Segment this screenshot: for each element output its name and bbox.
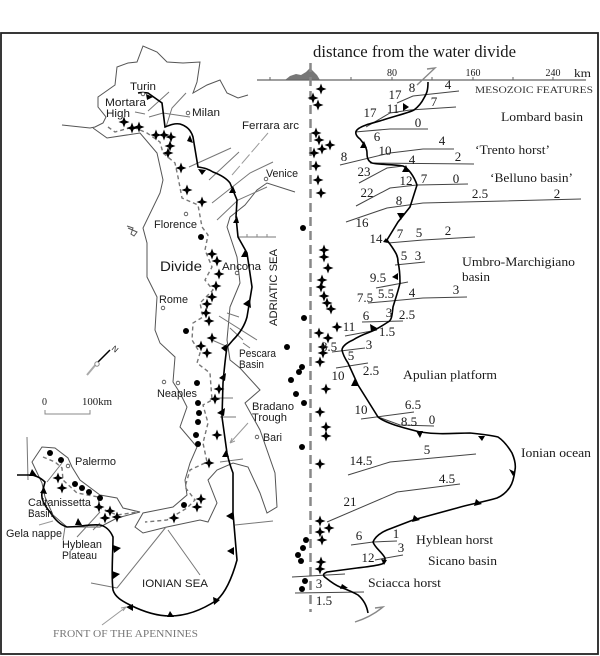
right panel: section numbers: 4	[409, 152, 416, 167]
right panel: section numbers: 1.5	[316, 593, 332, 608]
right panel: section numbers: 12	[362, 550, 374, 565]
map labels: Bradano	[252, 401, 294, 413]
right panel: section numbers: 2.5	[472, 186, 488, 201]
scale bar	[42, 397, 112, 414]
front of the Apennines label: FRONT OF THE APENNINES	[53, 629, 198, 640]
scale bar: 0	[42, 397, 47, 408]
right panel: section numbers: 3	[366, 337, 372, 352]
right panel: section numbers: 4	[439, 133, 446, 148]
right panel: section numbers: 5	[416, 225, 422, 240]
map labels: Rome	[159, 294, 188, 306]
right panel: section numbers: 14.5	[350, 453, 372, 468]
right panel: region labels: Lombard basin	[501, 109, 584, 124]
right panel: front triangles	[340, 103, 515, 589]
water divide on map	[43, 127, 213, 522]
right panel: section numbers: 2.5	[363, 363, 379, 378]
right panel: region labels: Sciacca horst	[368, 575, 441, 590]
map labels	[6, 81, 300, 590]
right panel: section numbers: 2	[445, 223, 451, 238]
map labels: Milan	[192, 107, 220, 119]
right panel: section numbers: 9.5	[370, 270, 386, 285]
right panel: section numbers: 3	[316, 576, 322, 591]
right panel: section numbers: 16	[356, 215, 369, 230]
map labels: Venice	[266, 168, 298, 180]
map labels: Caltanissetta	[28, 497, 92, 509]
map labels: High	[106, 108, 130, 120]
right panel: section numbers: 8.5	[321, 339, 337, 354]
right panel: section numbers: 5	[424, 442, 430, 457]
right panel: section numbers: 1.5	[379, 324, 395, 339]
right panel: section numbers: 6	[356, 528, 363, 543]
right panel: section numbers: 7	[421, 171, 428, 186]
right panel: region labels: Sicano basin	[428, 553, 498, 568]
right panel: section numbers: 0	[453, 171, 459, 186]
right panel: section numbers: 3	[415, 248, 421, 263]
right panel: region labels: Umbro-Marchigiano	[462, 254, 575, 269]
right panel: section numbers: 23	[358, 164, 370, 179]
right panel: section numbers: 4.5	[439, 471, 455, 486]
right panel: region labels: Apulian platform	[403, 367, 497, 382]
right panel: section numbers: 4	[445, 77, 452, 92]
right panel: stars	[308, 84, 342, 574]
map labels: Turin	[130, 81, 156, 93]
right panel: region labels: ‘Trento horst’	[475, 142, 550, 157]
right panel: section numbers	[316, 77, 560, 608]
map labels: Gela nappe	[6, 528, 62, 540]
right panel: section numbers: 3	[453, 282, 459, 297]
right panel: section numbers: 11	[343, 319, 355, 334]
right panel: section numbers: 5	[401, 248, 407, 263]
right panel: section numbers: 10	[378, 143, 392, 158]
map labels: Trough	[252, 412, 287, 424]
distance axis with terrain profile: km	[574, 66, 592, 80]
front of the Apennines on map	[17, 93, 252, 616]
map labels: Florence	[154, 219, 197, 231]
city markers	[66, 92, 268, 468]
right panel: section numbers: 12	[400, 173, 412, 188]
right panel: section numbers: 8	[409, 80, 415, 95]
map coastline	[32, 46, 295, 533]
right panel: section numbers: 17	[388, 87, 402, 102]
right panel: section numbers: 14	[370, 231, 383, 246]
right panel: section numbers: 8	[341, 149, 347, 164]
map labels: Neaples	[157, 388, 197, 400]
map labels: Plateau	[62, 550, 97, 562]
water divide reference line	[309, 63, 312, 612]
scale bar: 100km	[82, 397, 112, 408]
right panel: section numbers: 6.5	[405, 397, 421, 412]
map labels: Bari	[263, 432, 282, 444]
right panel: section numbers: 1	[393, 526, 399, 541]
map labels: Hyblean	[62, 539, 102, 551]
right panel: section numbers: 21	[344, 494, 356, 509]
right panel: section numbers: 7	[397, 226, 404, 241]
right panel: region labels: Ionian ocean	[521, 445, 592, 460]
grey arrows on map	[39, 133, 268, 625]
right panel: region labels: ‘Belluno basin’	[490, 170, 573, 185]
right panel: section numbers: 3	[398, 540, 404, 555]
right panel: dots	[284, 225, 309, 592]
right panel: front curve	[324, 82, 515, 613]
stars on map	[52, 116, 224, 524]
map labels: Palermo	[75, 456, 116, 468]
map labels: Basin	[239, 359, 264, 371]
right panel: section numbers: 11	[387, 101, 399, 116]
right panel: section numbers: 2	[455, 149, 461, 164]
right panel: section numbers: 0	[429, 412, 435, 427]
front triangles on map	[29, 94, 251, 617]
right panel: section numbers: 7	[431, 94, 438, 109]
right panel: section numbers: 4	[409, 285, 416, 300]
right panel: section numbers: 7.5	[357, 290, 373, 305]
right panel: grey arrows at ends of front	[355, 68, 435, 622]
right panel: section numbers: 10	[332, 368, 344, 383]
right panel: section numbers: 22	[360, 185, 374, 200]
map labels: ADRIATIC SEA	[268, 248, 280, 326]
title: distance from the water divide	[313, 42, 516, 61]
distance axis with terrain profile: 160	[466, 68, 480, 79]
right panel: section numbers: 0	[415, 115, 421, 130]
right panel: section numbers: 5.5	[378, 286, 394, 301]
map labels: IONIAN SEA	[142, 578, 209, 590]
right panel: section numbers: 8.5	[401, 414, 417, 429]
north arrow: N	[110, 344, 120, 355]
right panel: section numbers: 8	[396, 193, 402, 208]
right panel: thin section lines	[292, 91, 581, 593]
right panel: section numbers: 6	[363, 308, 370, 323]
right panel: section numbers: 10	[354, 402, 368, 417]
dots on map	[47, 234, 204, 508]
map labels: Divide	[160, 258, 202, 274]
map labels: Pescara	[239, 348, 277, 360]
distance axis with terrain profile: 80	[387, 68, 397, 79]
map labels: Ancona	[222, 261, 262, 273]
right panel: section numbers: 17	[364, 105, 377, 120]
right panel: section numbers: 5	[348, 348, 354, 363]
thin structural lines on map	[27, 92, 276, 588]
right panel: section numbers: 2.5	[399, 307, 415, 322]
right panel: region labels	[368, 109, 592, 590]
map labels: Ferrara arc	[242, 120, 300, 132]
distance axis with terrain profile: 240	[546, 68, 560, 79]
right panel: section numbers: 6	[374, 129, 381, 144]
right panel: region labels: Hyblean horst	[416, 532, 493, 547]
right panel: section numbers: 2	[554, 186, 560, 201]
distance axis with terrain profile	[257, 66, 592, 80]
map labels: Basin	[28, 508, 53, 520]
north arrow	[87, 344, 120, 375]
right panel: section numbers: 3	[386, 305, 392, 320]
map labels: Mortara	[105, 97, 147, 109]
right panel: region labels: basin	[462, 269, 490, 284]
mesozoic features heading: MESOZOIC FEATURES	[475, 85, 593, 95]
